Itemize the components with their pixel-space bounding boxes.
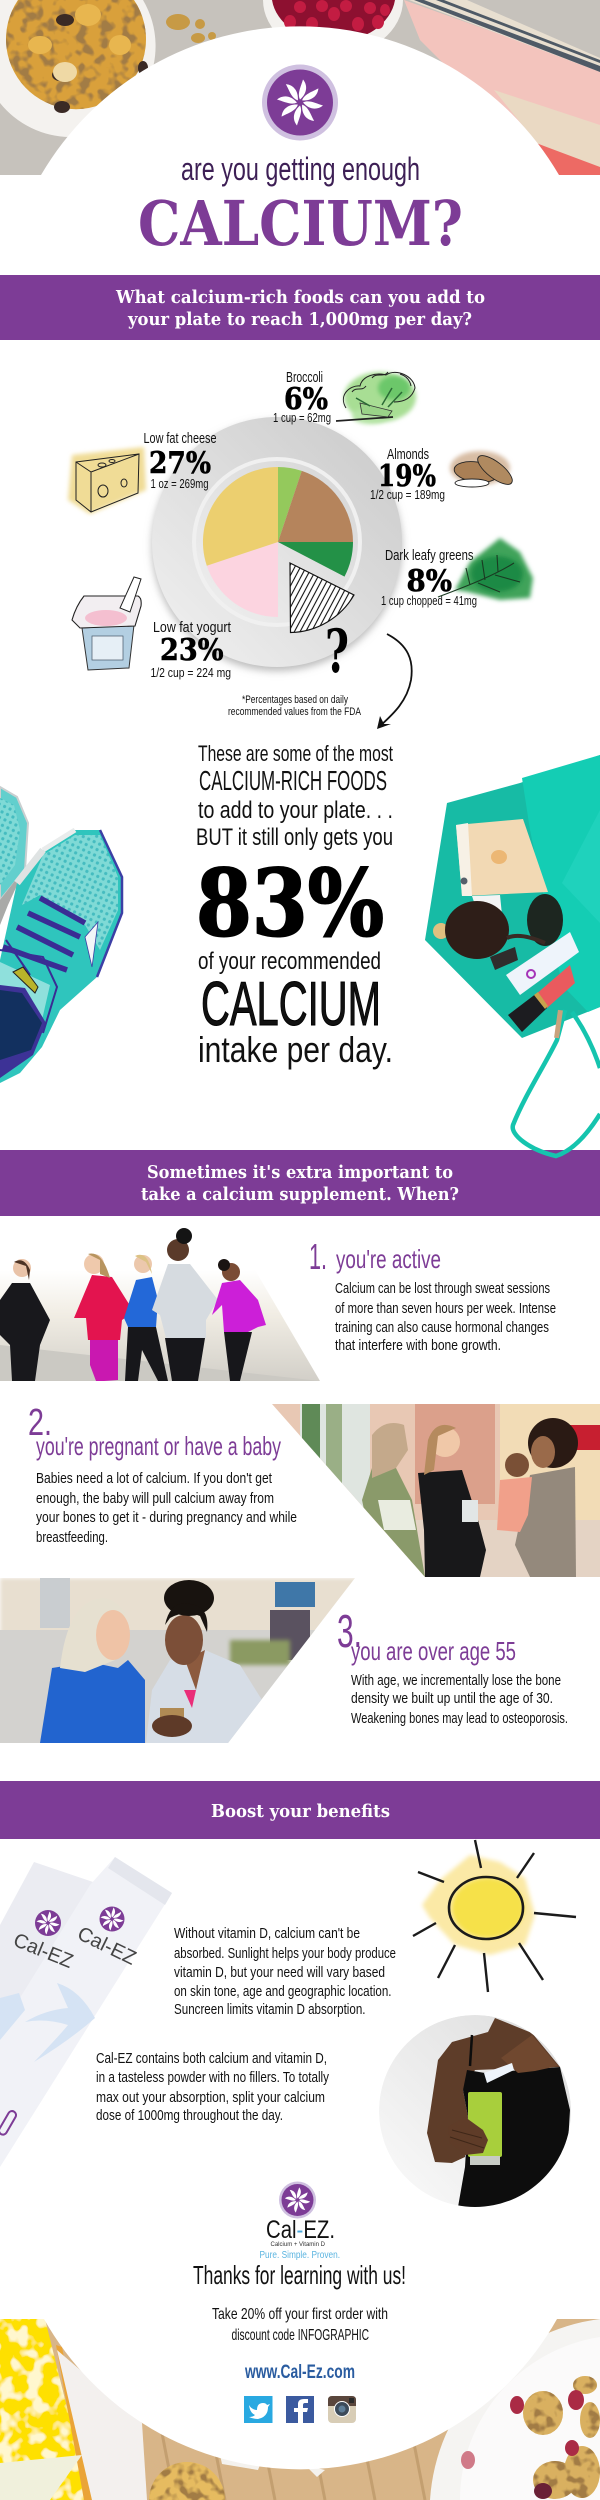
icon: facebook: [286, 2396, 314, 2423]
text block: vitamin D: Suncreen limits vitamin D absorption.: [174, 2001, 366, 2018]
pie slice: yogurt 23%: [207, 542, 278, 617]
hatched missing slice: [290, 563, 354, 632]
photo: two women with phone: [0, 1578, 360, 1743]
icon: yogurt cup: [72, 577, 141, 670]
label: low fat yogurt: [150, 619, 232, 680]
section 1: you're active: 1.: [309, 1236, 327, 1277]
footnote: recommended values from the FDA: [228, 706, 361, 718]
text block: 83 percent message: to add to your plate. . .: [198, 797, 393, 824]
label: broccoli: [273, 369, 331, 425]
runner in grey jacket: [152, 1264, 218, 1338]
woman in blue: [40, 1660, 145, 1743]
pie slice: broccoli 6%: [278, 467, 302, 542]
photo: running shoes: [0, 787, 122, 1083]
pregnant woman in black: [418, 1470, 486, 1577]
section 2: pregnant or baby: enough, the baby will pull calcium away from: [36, 1490, 274, 1507]
section 1: you're active: [309, 1236, 556, 1354]
banner: foods question: your plate to reach 1,000mg per day?: [127, 309, 472, 330]
icon: logo: [262, 64, 338, 140]
label: almonds: [370, 446, 445, 502]
banner: foods question: What calcium-rich foods can you add to: [115, 287, 485, 308]
text block: vitamin D: absorbed. Sunlight helps your body produce: [174, 1945, 396, 1962]
white arch behind title: [0, 26, 600, 275]
banner: boost benefits: [0, 1781, 600, 1839]
photo: Cal-EZ packets: [0, 1857, 172, 2167]
section 3: over age 55: 3.: [337, 1605, 362, 1657]
section 1: you're active: you're active: [336, 1244, 441, 1274]
text block: 83 percent message: CALCIUM-RICH FOODS: [199, 765, 387, 796]
section 3: over age 55: density we built up until the age of 30.: [351, 1690, 553, 1707]
label: broccoli: 6%: [284, 382, 328, 417]
label: low fat cheese: 1 oz = 269mg: [150, 476, 208, 491]
photo: Cal-EZ packets: Cal-EZ: [74, 1923, 139, 1970]
strap: [513, 1010, 600, 1156]
section 1: you're active: that interfere with bone growth.: [335, 1337, 501, 1354]
label: dark leafy greens: [381, 547, 477, 608]
text block: 83 percent message: [196, 741, 393, 1070]
title: are you getting enough: [181, 151, 420, 187]
label: low fat cheese: Low fat cheese: [144, 430, 216, 447]
text block: 83 percent message: of your recommended: [198, 948, 381, 975]
lipstick: [535, 965, 575, 1008]
pie slice: cheese 27%: [203, 467, 278, 566]
arrow: [377, 634, 412, 729]
label: almonds: 1/2 cup = 189mg: [370, 487, 445, 502]
text block: vitamin D: vitamin D, but your need will vary based: [174, 1964, 385, 1981]
coin: [433, 923, 449, 939]
label: low fat yogurt: Low fat yogurt: [153, 619, 232, 636]
lower hand: [465, 2119, 488, 2155]
section 2: pregnant or baby: you're pregnant or have a baby: [36, 1431, 281, 1461]
text block: vitamin D: [174, 1925, 396, 2018]
sunglasses: [445, 901, 509, 959]
discount text: [212, 2306, 388, 2344]
photo: teal purse: [425, 755, 600, 1156]
icon: sun: [413, 1840, 576, 1992]
woman in patterned dress: [362, 1468, 425, 1577]
text block: 83 percent message: These are some of the most: [198, 741, 393, 766]
label: almonds: Almonds: [387, 446, 429, 463]
runner in red jacket: [74, 1275, 134, 1340]
pie slice: dark leafy greens 8%: [278, 542, 353, 577]
section 2: pregnant or baby: [28, 1402, 297, 1546]
bowl of granola: [0, 0, 216, 137]
runner in blue jacket: [124, 1277, 158, 1327]
banner: supplement question: take a calcium supplement. When?: [141, 1184, 459, 1205]
green drink: [468, 2092, 502, 2157]
section 2: pregnant or baby: breastfeeding.: [36, 1529, 108, 1546]
icon: almonds: [450, 451, 516, 489]
section 3: over age 55: [337, 1605, 568, 1727]
logo: Cal-EZ: [260, 2182, 340, 2261]
section 3: over age 55: you are over age 55: [351, 1636, 516, 1666]
header food photo: [0, 0, 600, 175]
photo: Cal-EZ packets: Cal-EZ: [10, 1929, 76, 1973]
photo: women running: [0, 1228, 320, 1381]
phone: [456, 819, 548, 896]
footnote: *Percentages based on daily: [242, 694, 348, 706]
icon: instagram: [328, 2396, 356, 2423]
skin: [427, 2018, 560, 2163]
discount text: Take 20% off your first order with: [212, 2306, 388, 2323]
white cheese wedge: [0, 2455, 82, 2500]
yogurt plate with granola: [430, 2319, 600, 2500]
label: dark leafy greens: 8%: [406, 564, 452, 599]
runner in magenta: [212, 1280, 266, 1332]
text block: Cal-EZ: [96, 2050, 329, 2124]
label: low fat cheese: [144, 430, 216, 491]
label: low fat yogurt: 23%: [160, 633, 224, 668]
text block: vitamin D: Without vitamin D, calcium can't be: [174, 1925, 360, 1942]
logo: Cal-EZ: Cal-EZ.: [266, 2216, 335, 2244]
runner in black: [0, 1283, 50, 1381]
label: low fat yogurt: 1/2 cup = 224 mg: [150, 665, 231, 680]
supplement packet: [506, 932, 579, 995]
label: low fat cheese: 27%: [149, 446, 211, 481]
icon: kale leaf: [438, 538, 533, 600]
question mark: ?: [325, 617, 349, 687]
text block: 83 percent message: 83%: [196, 849, 384, 957]
text block: Cal-EZ: max out your absorption, split your calcium: [96, 2089, 325, 2106]
label: dark leafy greens: Dark leafy greens: [385, 547, 474, 564]
white napkin: [57, 2350, 147, 2500]
title: [138, 151, 463, 260]
pie slice: almonds 19%: [278, 471, 353, 542]
icon: twitter: [244, 2396, 272, 2423]
footnote: [228, 694, 361, 718]
label: dark leafy greens: 1 cup chopped = 41mg: [381, 593, 477, 608]
banner: supplement question: [0, 1150, 600, 1216]
icon: broccoli: [336, 372, 416, 424]
section 2: pregnant or baby: Babies need a lot of calcium. If you don't get: [36, 1470, 273, 1487]
baby: [505, 1453, 529, 1477]
thanks heading: Thanks for learning with us!: [193, 2260, 406, 2290]
photo: pregnant women and baby: [270, 1404, 600, 1577]
text block: Cal-EZ: Cal-EZ contains both calcium and vitamin D,: [96, 2050, 327, 2067]
logo: Cal-EZ: Pure. Simple. Proven.: [260, 2250, 340, 2261]
cheese block: [0, 2319, 90, 2500]
text block: 83 percent message: BUT it still only gets you: [196, 824, 393, 851]
white circle behind closing text: [44, 2319, 557, 2469]
footer food photo: [0, 2319, 600, 2500]
paper scraps: [220, 2458, 260, 2470]
photo: woman with green drink: [379, 2015, 571, 2207]
text block: vitamin D: on skin tone, age and geographic location.: [174, 1983, 392, 2000]
text block: Cal-EZ: in a tasteless powder with no fillers. To totally: [96, 2069, 329, 2086]
text block: 83 percent message: CALCIUM: [201, 970, 381, 1039]
black dress: [458, 2067, 570, 2207]
section 2: pregnant or baby: your bones to get it - during pregnancy and while: [36, 1509, 297, 1526]
upper hand: [501, 2035, 558, 2073]
website link: www.Cal-Ez.com: [244, 2362, 355, 2383]
bowl of pomegranate seeds: [263, 0, 403, 56]
striped napkin: [404, 0, 600, 175]
logo: Cal-EZ: Calcium + Vitamin D: [270, 2241, 325, 2248]
label: almonds: 19%: [378, 459, 436, 494]
woman with curly hair: [528, 1418, 578, 1468]
banner: supplement question: Sometimes it's extra important to: [147, 1162, 453, 1183]
label: broccoli: Broccoli: [286, 369, 323, 386]
section 2: pregnant or baby: 2.: [28, 1402, 52, 1444]
banner: boost benefits: Boost your benefits: [211, 1801, 390, 1822]
discount text: discount code INFOGRAPHIC: [232, 2327, 369, 2344]
icon: cheese: [68, 447, 146, 514]
woman in light jacket: [146, 1650, 262, 1743]
supplement stick: [484, 2063, 514, 2083]
banner: foods question: [0, 275, 600, 340]
title: CALCIUM?: [138, 187, 463, 260]
plate chart: [152, 417, 402, 671]
label: broccoli: 1 cup = 62mg: [273, 410, 331, 425]
text block: Cal-EZ: dose of 1000mg throughout the day.: [96, 2107, 283, 2124]
text block: 83 percent message: intake per day.: [198, 1029, 393, 1070]
cracker: [149, 2462, 225, 2500]
